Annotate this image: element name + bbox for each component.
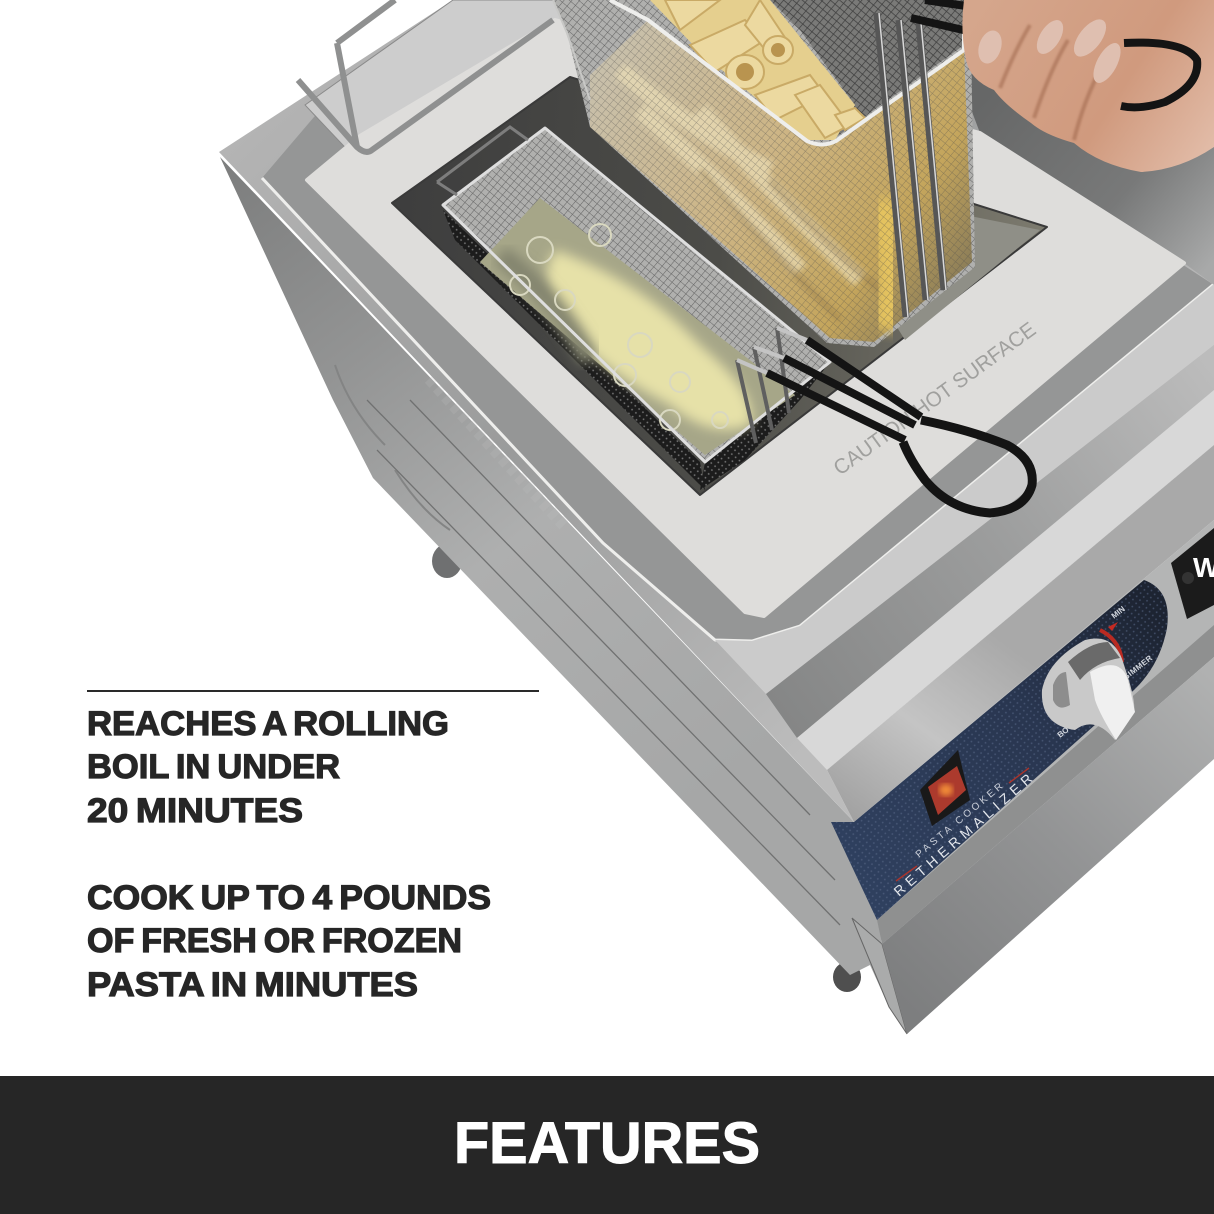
- inner plate: [307, 20, 1184, 616]
- back step: [305, 0, 640, 160]
- top deck: [219, 0, 1214, 822]
- basket posts: [877, 13, 944, 317]
- cooking well: [392, 77, 1047, 495]
- basket handle: black: [737, 328, 1032, 513]
- text block: capacity: COOK UP TO 4 POUNDS: [87, 879, 491, 917]
- side rack handle: [298, 0, 553, 152]
- right back gutter: [930, 0, 1214, 285]
- control panel: [831, 520, 1214, 944]
- gutter: [262, 20, 1214, 640]
- raised basket with pasta: [553, 0, 1000, 347]
- text block: capacity: [87, 879, 491, 1004]
- label: dial markings: [896, 604, 1154, 881]
- label: dial markings: MIN: [1110, 604, 1127, 621]
- text block: capacity: OF FRESH OR FROZEN: [87, 922, 462, 960]
- text block: capacity: PASTA IN MINUTES: [87, 966, 418, 1004]
- lowered basket with boiling pasta: [437, 127, 830, 490]
- power switch: [920, 750, 970, 826]
- left side panel: [220, 157, 889, 1007]
- dial knob: [1042, 638, 1135, 740]
- text block: boil time: 20 MINUTES: [87, 792, 303, 830]
- lower front panel: [882, 657, 1214, 1034]
- divider line: [87, 690, 539, 692]
- footer banner: [0, 1076, 1214, 1214]
- footer title: FEATURES: [454, 1111, 760, 1176]
- label: rethermalizer: RETHERMALIZER: [890, 770, 1035, 899]
- label: dial markings: SIMMER: [1122, 653, 1154, 682]
- label: pasta cooker: PASTA COOKER: [914, 781, 1005, 860]
- text block: boil time: [87, 705, 449, 830]
- text block: boil time: BOIL IN UNDER: [87, 748, 340, 786]
- strips along the front of the deck: [715, 284, 1214, 770]
- brand badge: [1171, 528, 1214, 619]
- engraved caution text: CAUTION HOT SURFACE: [829, 318, 1040, 480]
- product photo: pasta cooker: [219, 0, 1214, 1034]
- hand holding handle: [911, 0, 1214, 172]
- blue control label: [831, 580, 1168, 920]
- front lip: [827, 445, 1214, 822]
- label: dial markings: BO: [1056, 725, 1071, 740]
- text block: boil time: REACHES A ROLLING: [87, 705, 449, 743]
- rigatoni in basket: [650, 0, 1000, 140]
- feet: [432, 544, 861, 992]
- side corner strip: [852, 918, 907, 1034]
